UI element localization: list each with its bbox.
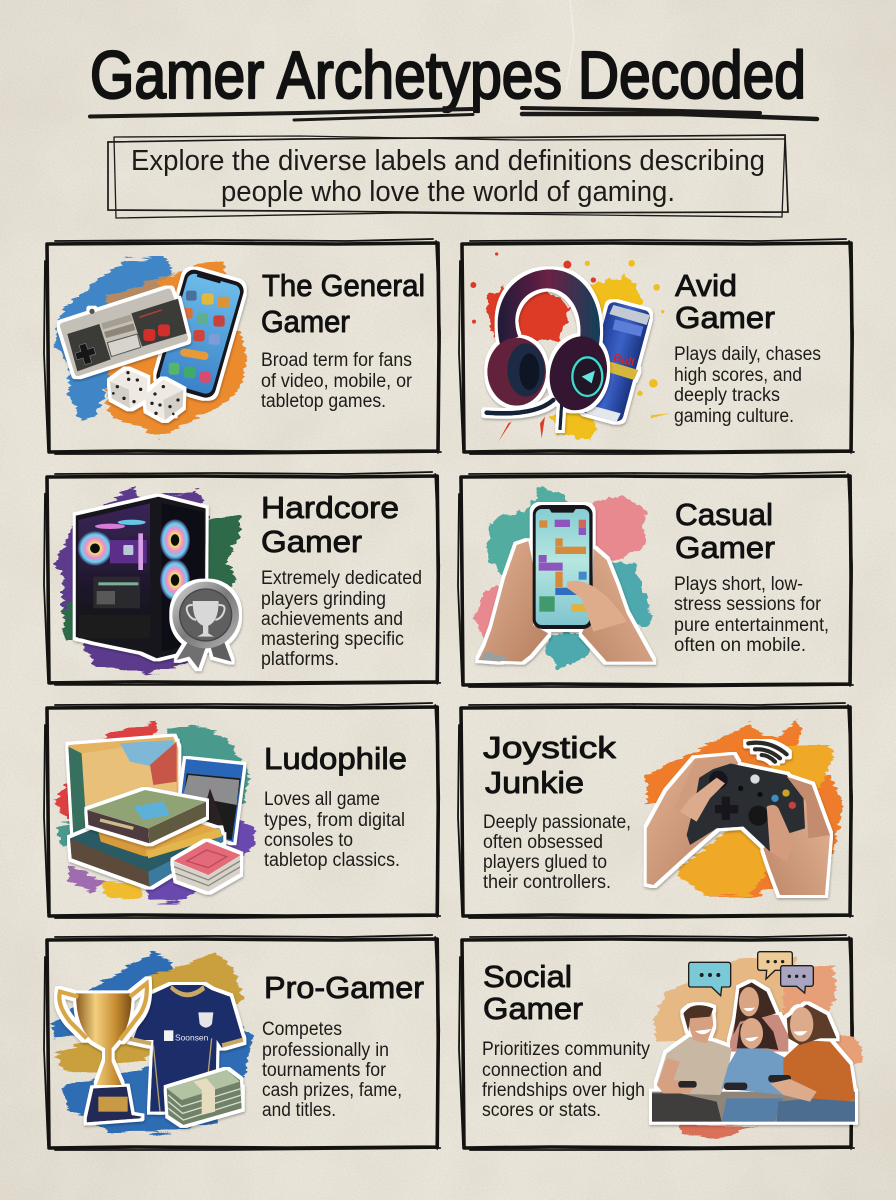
panel: Casual Gamer	[458, 472, 853, 687]
description: types, from digital	[264, 810, 405, 831]
heading: Hardcore	[261, 490, 399, 525]
description: Extremely dedicated	[261, 568, 422, 589]
panel: Pro-Gamer	[44, 935, 440, 1150]
description: Competes	[262, 1019, 342, 1040]
description: Deeply passionate,	[483, 812, 631, 833]
title: Gamer Archetypes Decoded	[90, 37, 806, 113]
heading	[483, 730, 617, 800]
heading: Gamer	[483, 991, 583, 1026]
heading: Junkie	[485, 765, 584, 800]
illustration: gaming headset and energy drink: Bull	[612, 352, 636, 369]
heading: Gamer	[675, 300, 775, 335]
title underline strokes	[90, 108, 817, 120]
description: Loves all game	[264, 789, 380, 810]
description: tournaments for	[262, 1060, 387, 1081]
description: of video, mobile, or	[261, 371, 413, 392]
illustration: gaming PC and trophy medal	[55, 487, 240, 675]
panel: Avid Gamer	[459, 239, 854, 454]
panel: Ludophile	[44, 703, 440, 918]
description: friendships over high	[482, 1080, 645, 1101]
heading: Ludophile	[264, 741, 407, 776]
description: mastering specific	[261, 629, 404, 650]
description: connection and	[482, 1060, 602, 1081]
description	[262, 1019, 402, 1121]
description	[261, 568, 422, 670]
heading	[675, 268, 775, 335]
description: often on mobile.	[674, 635, 806, 656]
illustration: trophy, jersey and cash	[52, 952, 253, 1133]
description: stress sessions for	[674, 594, 822, 615]
illustration: NES controller, phone and dice	[53, 257, 248, 437]
description	[674, 574, 829, 656]
description: pure entertainment,	[674, 615, 829, 636]
description	[483, 812, 631, 893]
description: scores or stats.	[482, 1100, 601, 1121]
description: achievements and	[261, 609, 403, 630]
description: consoles to	[264, 830, 353, 851]
heading	[675, 497, 775, 565]
description: often obsessed	[483, 832, 603, 853]
heading	[261, 268, 425, 339]
illustration: trophy, jersey and cash: Soonsen	[175, 1033, 208, 1043]
subtitle box: Explore the diverse labels and definitions describing	[131, 145, 765, 177]
description: players grinding	[261, 589, 386, 610]
illustration: friends gaming together with chat bubbles	[652, 952, 863, 1138]
subtitle box	[108, 135, 788, 218]
description: Prioritizes community	[482, 1039, 650, 1060]
description	[674, 344, 821, 427]
heading: Gamer	[675, 530, 775, 565]
description: Plays short, low-	[674, 574, 803, 595]
heading: Social	[483, 959, 572, 994]
heading: Avid	[675, 268, 737, 303]
description: and titles.	[262, 1100, 336, 1121]
illustration: hands holding phone with block puzzle	[473, 488, 653, 668]
description: tabletop classics.	[264, 850, 400, 871]
panel: The General Gamer	[44, 239, 441, 454]
heading: Joystick	[483, 730, 617, 765]
description: professionally in	[262, 1040, 389, 1061]
heading: The General	[262, 268, 425, 303]
panel: Social Gamer	[459, 935, 863, 1150]
description: high scores, and	[674, 365, 802, 386]
description	[482, 1039, 650, 1121]
illustration: board games, game case and cards	[53, 722, 257, 902]
description: Plays daily, chases	[674, 344, 821, 365]
illustration: gaming headset and energy drink	[470, 252, 670, 442]
description: platforms.	[261, 649, 339, 670]
heading: Casual	[675, 497, 773, 532]
heading: Pro-Gamer	[264, 970, 424, 1005]
panel: Hardcore Gamer	[44, 472, 440, 685]
description: tabletop games.	[261, 391, 386, 412]
heading	[483, 959, 583, 1026]
description: Broad term for fans	[261, 350, 412, 371]
chat bubbles	[689, 952, 813, 996]
heading: Gamer	[261, 524, 362, 559]
subtitle box: people who love the world of gaming.	[221, 176, 675, 208]
illustration: hands holding controller	[647, 722, 843, 898]
heading: Gamer	[261, 304, 350, 339]
panel: Joystick Junkie	[458, 703, 853, 918]
description: players glued to	[483, 852, 607, 873]
description	[261, 350, 413, 412]
description: cash prizes, fame,	[262, 1080, 402, 1101]
heading	[261, 490, 399, 559]
description: deeply tracks	[674, 385, 780, 406]
description: gaming culture.	[674, 406, 794, 427]
description	[264, 789, 405, 871]
description: their controllers.	[483, 872, 611, 893]
